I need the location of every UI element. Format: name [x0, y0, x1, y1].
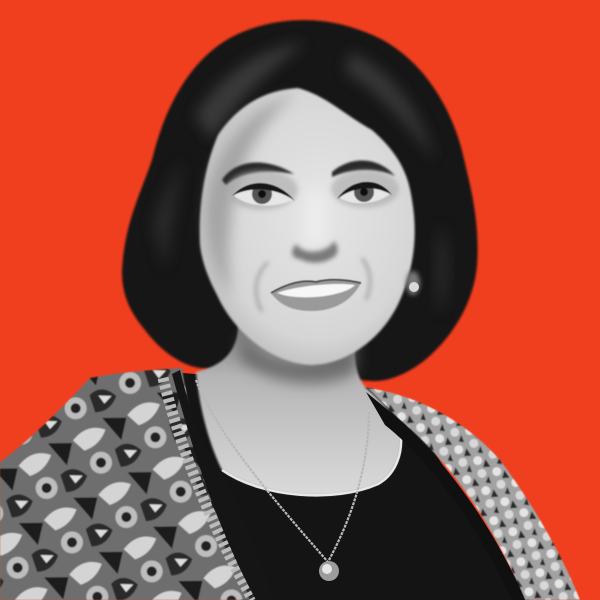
scarf right side	[368, 388, 580, 600]
necklace pendant	[319, 561, 339, 581]
dark inner right lapel	[366, 392, 525, 600]
face	[200, 88, 415, 365]
smile lines	[256, 258, 370, 312]
right eyebrow	[332, 160, 395, 177]
face shadow on hairline	[206, 92, 296, 295]
hair	[122, 20, 478, 381]
scarf left side	[0, 368, 262, 600]
neck and chest	[196, 325, 401, 495]
scarf left border	[163, 378, 253, 600]
dark lapel inner edge	[172, 370, 275, 600]
right eye	[331, 170, 399, 208]
white neckline trim	[222, 430, 401, 495]
necklace chain	[196, 380, 369, 562]
black top base	[170, 372, 530, 600]
nose bridge highlight	[304, 190, 326, 245]
left eyebrow	[222, 163, 294, 185]
neck shadow	[240, 325, 358, 384]
ear and earring	[406, 271, 420, 295]
mouth	[271, 280, 361, 311]
left eye	[226, 170, 298, 210]
hair highlights	[195, 42, 305, 140]
nose	[292, 241, 338, 263]
